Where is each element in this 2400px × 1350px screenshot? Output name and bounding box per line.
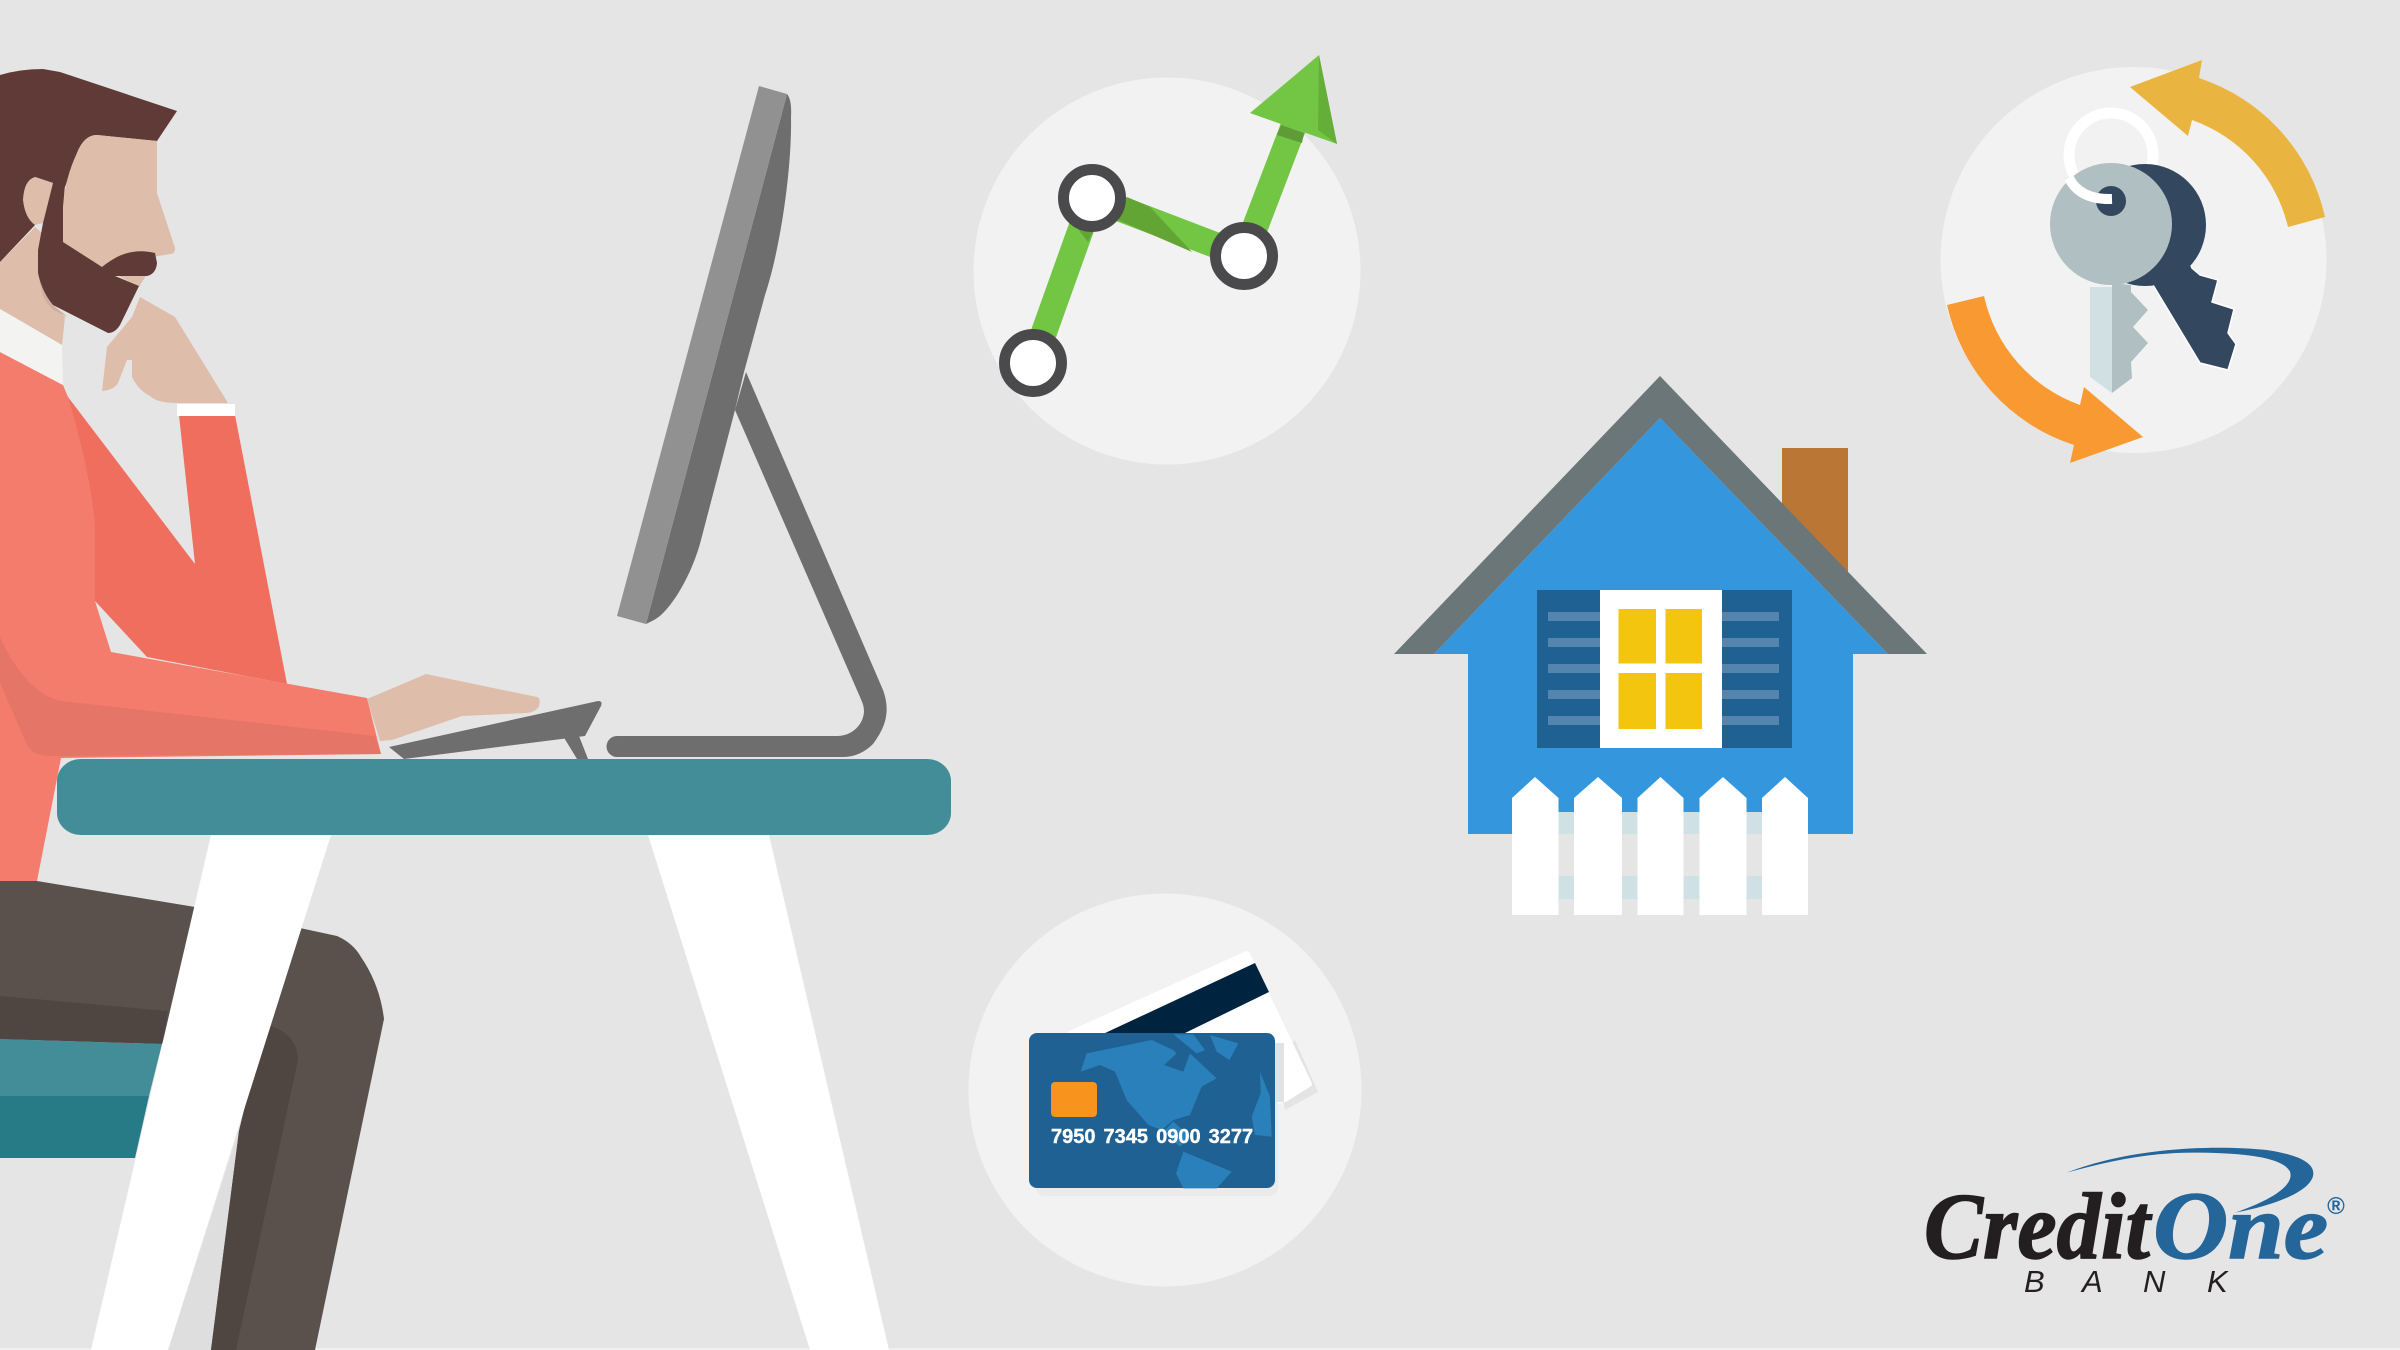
neck [0,227,65,345]
dark key [2084,164,2236,370]
line shadows [1118,197,1192,252]
arrow head [1250,55,1337,144]
face [63,135,175,270]
monitor back [646,94,791,624]
orange arrow [1947,296,2143,463]
man: torso and front arm [0,352,381,881]
monitor stand [606,372,887,757]
desk [57,759,951,1350]
front card [1029,1033,1275,1188]
registered mark: ® [2327,1193,2345,1220]
desk legs [91,835,331,1350]
light key [2050,163,2172,393]
beard [38,183,157,333]
back card [1070,954,1309,1105]
front card shadow [1036,1043,1284,1196]
card number: 7950 7345 0900 3277 [1051,1126,1253,1148]
logo: Credit One Bank [1924,1148,2345,1299]
chart nodes [1004,334,1062,392]
window [1600,590,1722,748]
man: hand on chin [102,297,235,416]
panel: growth chart circle [974,55,1360,464]
world map [1081,1034,1272,1188]
man's trousers [0,881,384,1350]
logo word: One: One [2153,1172,2328,1279]
panel: house [1394,376,1927,915]
panel: credit cards circle [968,894,1362,1286]
man: hand on keyboard [367,674,540,741]
fence [1512,777,1808,915]
green line [1033,128,1293,363]
logo word: BANK: BANK [2024,1264,2229,1299]
collar [0,309,63,385]
chair seat [0,1039,162,1158]
ear [23,177,53,225]
lower lip [115,274,147,287]
logo word: Credit: Credit [1924,1175,2153,1279]
roof [1394,376,1927,654]
hair [0,69,177,262]
back card shadow [1275,1040,1318,1110]
chimney [1782,448,1848,575]
monitor edge [617,86,787,624]
house body [1434,418,1888,834]
shutters [1537,590,1792,748]
computer monitor [606,86,887,757]
chip [1051,1082,1097,1117]
man: head [0,69,177,385]
keyboard [389,701,602,759]
gold arrow [2130,60,2325,227]
desk top [57,759,951,835]
man: back arm [68,397,287,684]
logo swoosh [2067,1148,2313,1213]
key ring [2069,113,2153,197]
sleeve shadow [0,637,381,756]
panel: keys circle [1940,60,2326,463]
shirt cuff [177,404,235,416]
